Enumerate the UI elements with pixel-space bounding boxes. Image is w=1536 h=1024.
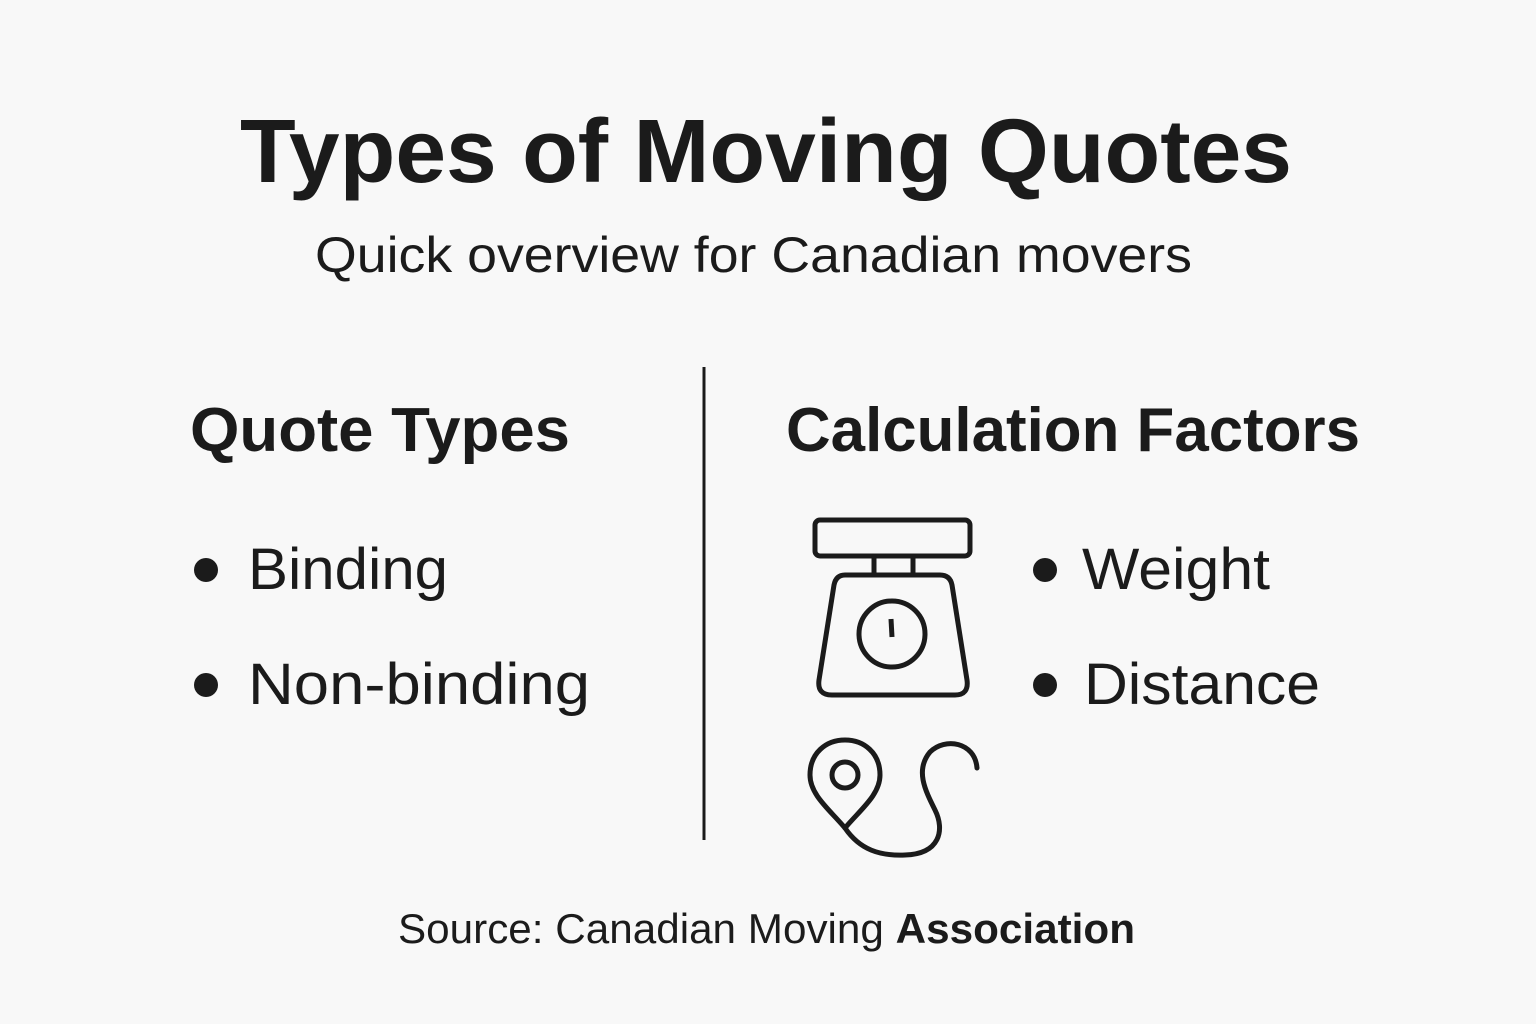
title: Types of Moving Quotes xyxy=(240,102,1292,202)
panel: quote types xyxy=(190,396,590,717)
bullet: weight: Weight xyxy=(1082,537,1270,602)
panel: calculation factors xyxy=(786,396,1360,855)
source note: Source: Canadian Moving Association xyxy=(398,905,1135,952)
icon: location route xyxy=(810,740,977,855)
bullet: non-binding: Non-binding xyxy=(248,652,590,717)
divider xyxy=(702,367,706,840)
bullet: binding: Binding xyxy=(248,537,448,602)
heading: calculation factors: Calculation Factors xyxy=(786,396,1360,465)
icon: scale xyxy=(815,520,970,695)
bullet: distance: Distance xyxy=(1084,652,1320,717)
subtitle: Quick overview for Canadian movers xyxy=(315,227,1192,283)
heading: quote types: Quote Types xyxy=(190,396,570,465)
